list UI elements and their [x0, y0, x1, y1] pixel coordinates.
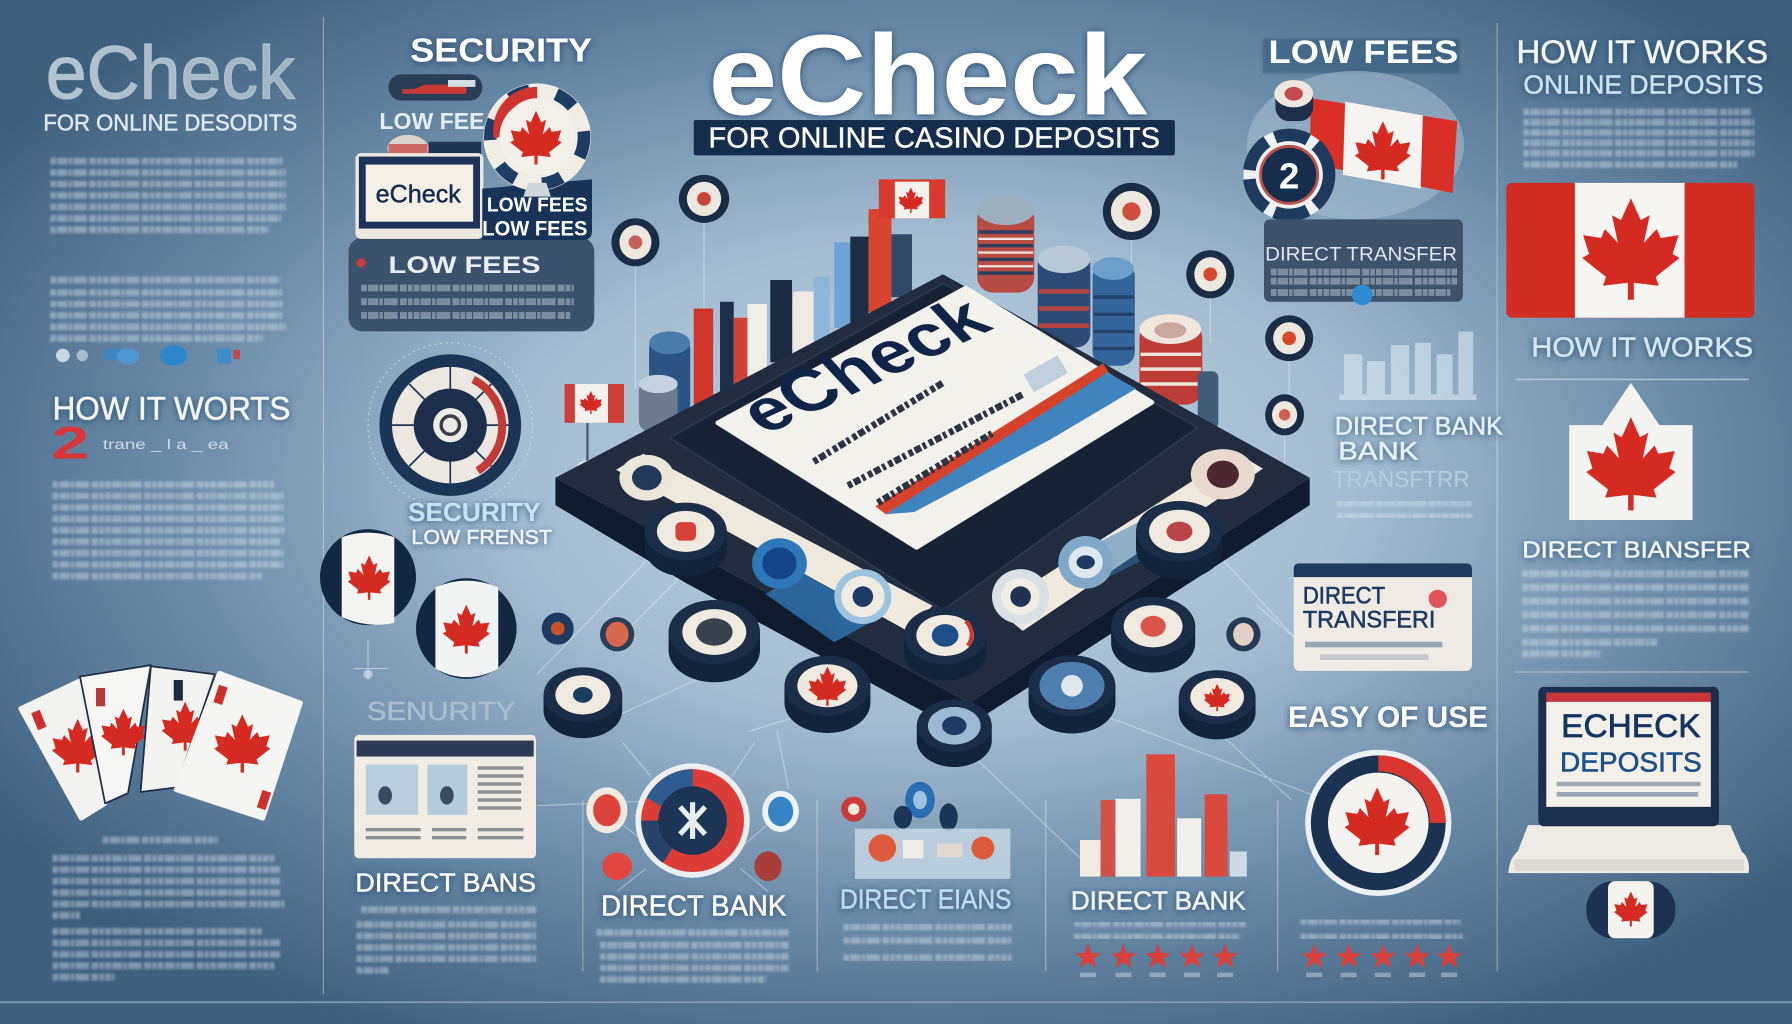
label: low fees partial: LOW FEE [379, 108, 485, 134]
panel: direct bank dial [586, 743, 799, 979]
laptop: eCheck: eCheck [376, 180, 461, 208]
cream strips [616, 453, 1263, 642]
text block 1 [50, 161, 286, 230]
puck: blue emblem [1029, 655, 1115, 733]
step caption: trane _ l a _ ea [103, 437, 229, 452]
chip: number 2: 2 [1279, 156, 1299, 197]
panel: laptop echeck deposits: DEPOSITS [1560, 746, 1702, 777]
panel: dark low fees: LOW FEES [389, 252, 541, 279]
red step number: 2 [51, 417, 89, 468]
puck: cream right [992, 569, 1049, 624]
panel: webpage card: SENURITY [367, 696, 515, 726]
panel: security low fees [349, 33, 594, 331]
panel: how it works right [1506, 34, 1768, 363]
puck: swirl center [904, 607, 986, 681]
panel: laptop echeck deposits: ECHECK [1561, 708, 1701, 744]
main title: eCheck [709, 12, 1148, 139]
labels: direct bank transfer: BANK [1338, 437, 1419, 465]
heading: eCheck faded: eCheck [46, 30, 295, 114]
tiny icon row [1523, 952, 1714, 958]
puck: cream left [834, 569, 891, 624]
subtitle banner: FOR ONLINE CASINO DEPOSITS [709, 122, 1160, 154]
puck: big dark center [669, 600, 760, 682]
small bars chart [1339, 331, 1477, 400]
panel: direct transfer text [1522, 537, 1751, 654]
icon: flag badge [1586, 881, 1675, 938]
chip stack [1274, 80, 1313, 121]
panel: direct bank stars [1071, 886, 1246, 975]
heading: how it works: HOW IT WORTS [53, 390, 290, 426]
flag: waving canada [1310, 98, 1457, 193]
panel: direct bank stars: DIRECT BANK [1071, 886, 1246, 916]
label box: low fees twice: LOW FEES [487, 193, 587, 216]
card: direct transfer: DIRECT [1303, 582, 1385, 609]
small pill icon [389, 74, 482, 101]
puck: flag right [1136, 501, 1223, 579]
bar chart [1080, 754, 1247, 877]
small chip stack [387, 135, 481, 162]
card: echeck [718, 284, 1152, 547]
chip stacks [639, 195, 1218, 432]
small puck left [542, 613, 574, 645]
labels: security low fees: SECURITY [408, 497, 541, 527]
labels: security low fees: LOW FRENST [411, 526, 552, 549]
echeck wordmark: eCheck [723, 284, 1005, 446]
panel: easy of use: EASY OF USE [1288, 701, 1488, 734]
platform base [555, 274, 1310, 731]
pin markers [611, 175, 1313, 435]
footer rule [0, 1001, 1792, 1003]
flag: large canada [1506, 183, 1754, 318]
puck: red leaf [784, 656, 870, 733]
label box: low fees twice: LOW FEES [482, 215, 587, 240]
subheading: for online deposits: FOR ONLINE DESODITS [43, 109, 297, 135]
puck: red star [1179, 670, 1256, 739]
text block 3 [53, 485, 286, 576]
panel: how it works right: HOW IT WORKS [1517, 34, 1768, 70]
text block 2 [50, 280, 286, 338]
panel: webpage card [354, 696, 537, 970]
panel: low fees right [1243, 34, 1464, 305]
platform [555, 274, 1310, 731]
labels: direct bank transfer: TRANSFTRR [1333, 466, 1470, 492]
panel: direct transfer dark: DIRECT TRANSFER [1265, 244, 1457, 266]
icon: flag ball 1 [320, 529, 416, 625]
heading: low fees: LOW FEES [1269, 34, 1458, 70]
column: left intro [43, 30, 297, 576]
puck: navy leaf [544, 667, 622, 738]
labels: security low fees [408, 497, 552, 549]
panel: laptop echeck deposits [1509, 687, 1749, 873]
chip: number 2 [1243, 129, 1335, 221]
inner platform [670, 283, 1198, 610]
small puck right [1226, 617, 1261, 651]
panel: dark low fees [349, 238, 594, 331]
flag: center [879, 179, 945, 218]
end chip right [1191, 449, 1255, 499]
icon: maple leaf shield [1569, 383, 1693, 520]
panel: easy of use [1288, 701, 1488, 975]
text block below cards [53, 840, 286, 977]
label box: low fees twice [482, 179, 592, 240]
icon: flag ball 2 [416, 578, 517, 679]
panel: how it works right: ONLINE DEPOSITS [1523, 70, 1763, 100]
heading: security: SECURITY [410, 33, 592, 70]
icon: playing cards [21, 665, 301, 818]
icon: maple leaf chip [483, 83, 591, 197]
puck: red swirl [1111, 597, 1195, 673]
card: direct transfer: TRANSFERI [1303, 606, 1435, 633]
panel: webpage card: DIRECT BANS [355, 867, 536, 897]
puck: swirl bottom [917, 699, 992, 767]
end chip left [619, 455, 674, 501]
labels: direct bank transfer: DIRECT BANK [1335, 412, 1503, 440]
pucks on platform [542, 449, 1261, 767]
puck: blue small left [752, 538, 807, 589]
small pin icon [354, 640, 389, 680]
card: direct transfer [1294, 563, 1472, 671]
panel: direct bank dial: DIRECT BANK [601, 890, 786, 922]
panel: direct transfer text: DIRECT BIANSFER [1522, 537, 1751, 563]
icon: security dial [368, 343, 533, 507]
puck: blue right [1058, 536, 1113, 589]
small canada flag with pole [565, 384, 624, 472]
panel: how it works right: HOW IT WORKS [1531, 332, 1753, 363]
panel: chips illustration direct trans: DIRECT EIANS [840, 884, 1011, 915]
panel: direct transfer dark [1264, 219, 1463, 305]
small icon row [56, 345, 240, 366]
small puck red [600, 617, 634, 651]
labels: direct bank transfer [1333, 412, 1503, 517]
connector lines [537, 199, 1326, 874]
panel: chips illustration direct trans [840, 782, 1011, 958]
laptop: eCheck [355, 153, 483, 239]
puck: red icon [645, 503, 727, 577]
bars behind platform [694, 209, 912, 411]
